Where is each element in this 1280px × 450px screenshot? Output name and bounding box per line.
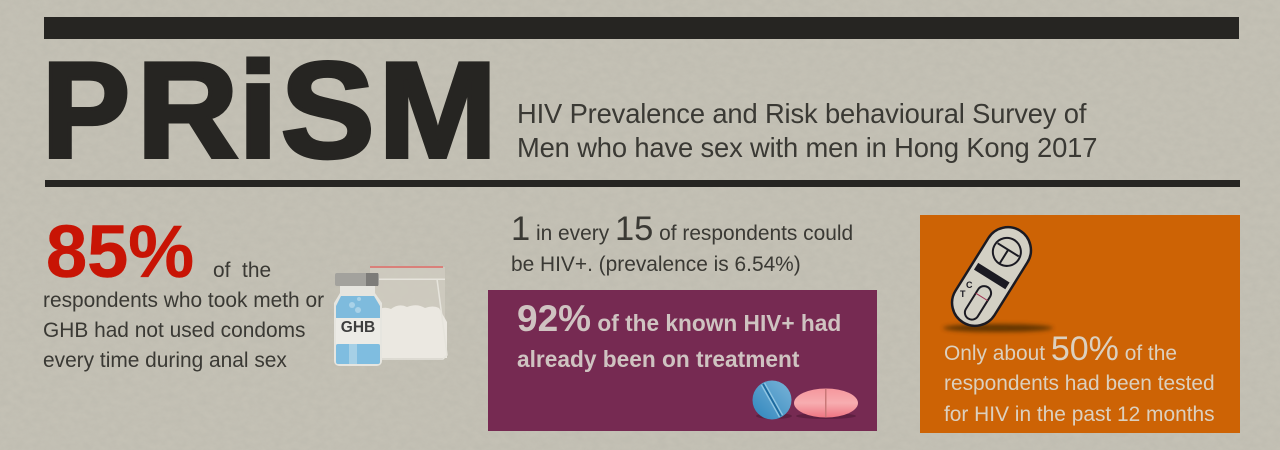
icon: HIV test cassette: T	[960, 289, 966, 299]
85% description	[43, 258, 324, 372]
icon: HIV test cassette: C	[966, 280, 973, 290]
testing description: Only about 50% of the	[944, 330, 1177, 368]
testing description	[944, 330, 1215, 426]
big number 85%: 85%	[46, 210, 194, 293]
85% description: every time during anal sex	[43, 349, 287, 372]
stat block: 85% condom use	[43, 210, 324, 372]
pink capsule	[794, 388, 858, 418]
title: PRiSM	[42, 34, 497, 180]
subtitle	[517, 98, 1097, 163]
treatment text: 92% of the known HIV+ had	[517, 298, 841, 339]
treatment text	[517, 298, 841, 372]
stat text: 1 in every 15: 1 in every 15 of respondents could	[511, 210, 853, 248]
subtitle: Men who have sex with men in Hong Kong 2017	[517, 132, 1097, 163]
icon: GHB vial and bag of powder	[334, 266, 448, 366]
top black bar	[44, 17, 1239, 39]
plastic bag	[370, 266, 447, 359]
stat text: 1 in every 15	[511, 210, 853, 276]
icon: HIV test cassette	[942, 226, 1054, 335]
header rule	[45, 180, 1240, 187]
testing description: for HIV in the past 12 months	[944, 402, 1215, 426]
85% description: respondents who took meth or	[43, 289, 324, 312]
blue tablet	[752, 380, 792, 420]
icon: pills	[752, 380, 858, 420]
panel: testing	[920, 215, 1240, 433]
vial: GHB	[341, 319, 375, 336]
treatment text: already been on treatment	[517, 346, 799, 372]
panel: treatment	[488, 290, 877, 431]
85% description: of the	[213, 258, 271, 282]
85% description: GHB had not used condoms	[43, 319, 305, 342]
testing description: respondents had been tested	[944, 372, 1215, 395]
stat text: 1 in every 15: be HIV+. (prevalence is 6.54%)	[511, 252, 801, 276]
subtitle: HIV Prevalence and Risk behavioural Survey of	[517, 98, 1086, 129]
